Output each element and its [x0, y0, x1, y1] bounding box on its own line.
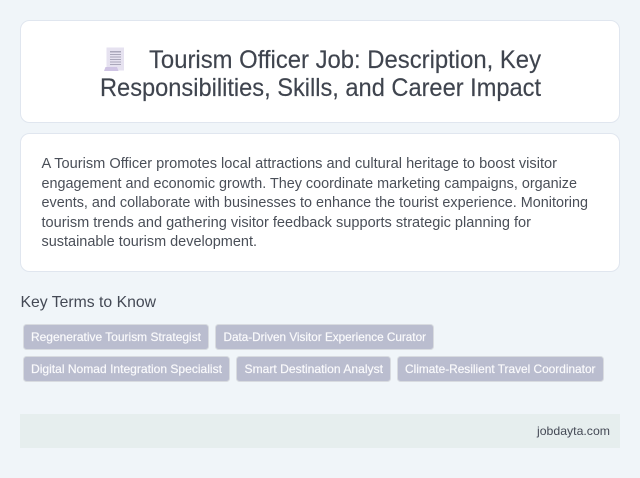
title: Tourism Officer Job: Description, Key: [149, 46, 541, 74]
tag: Data-Driven Visitor Experience Curator: Data-Driven Visitor Experience Curator: [224, 330, 426, 344]
title: Responsibilities, Skills, and Career Impact: [100, 74, 541, 102]
tag: Regenerative Tourism Strategist: [24, 324, 208, 350]
tag: Climate-Resilient Travel Coordinator: Climate-Resilient Travel Coordinator: [405, 362, 596, 376]
tag: Data-Driven Visitor Experience Curator: [216, 324, 434, 350]
tag: Digital Nomad Integration Specialist: [24, 356, 230, 382]
panel: description card: [20, 134, 620, 272]
tag: Digital Nomad Integration Specialist: Digital Nomad Integration Specialist: [31, 362, 223, 376]
panel: title card: [20, 20, 620, 122]
tag: Smart Destination Analyst: Smart Destination Analyst: [244, 362, 384, 376]
heading: key terms: Key Terms to Know: [20, 294, 156, 311]
footer text: jobdayta.com: [536, 424, 610, 438]
title: [100, 46, 541, 102]
tag: Regenerative Tourism Strategist: Regenerative Tourism Strategist: [31, 330, 202, 344]
tag: Climate-Resilient Travel Coordinator: [398, 356, 604, 382]
text block: description: [42, 156, 588, 250]
icon: document scroll: [104, 48, 124, 71]
text block: description: sustainable tourism development.: [42, 234, 257, 250]
text block: description: A Tourism Officer promotes local attractions and cultural heritage to boost visitor: [42, 156, 557, 172]
footer bar: [20, 414, 620, 448]
text block: description: tourism trends and gathering visitor feedback supports strategic planning for: [42, 215, 531, 231]
text block: description: engagement and economic growth. They coordinate marketing campaigns, organize: [42, 176, 577, 192]
text block: description: events, and collaborate with businesses to enhance the tourist experience. Monitoring: [42, 195, 588, 211]
tag: Smart Destination Analyst: [236, 356, 390, 382]
